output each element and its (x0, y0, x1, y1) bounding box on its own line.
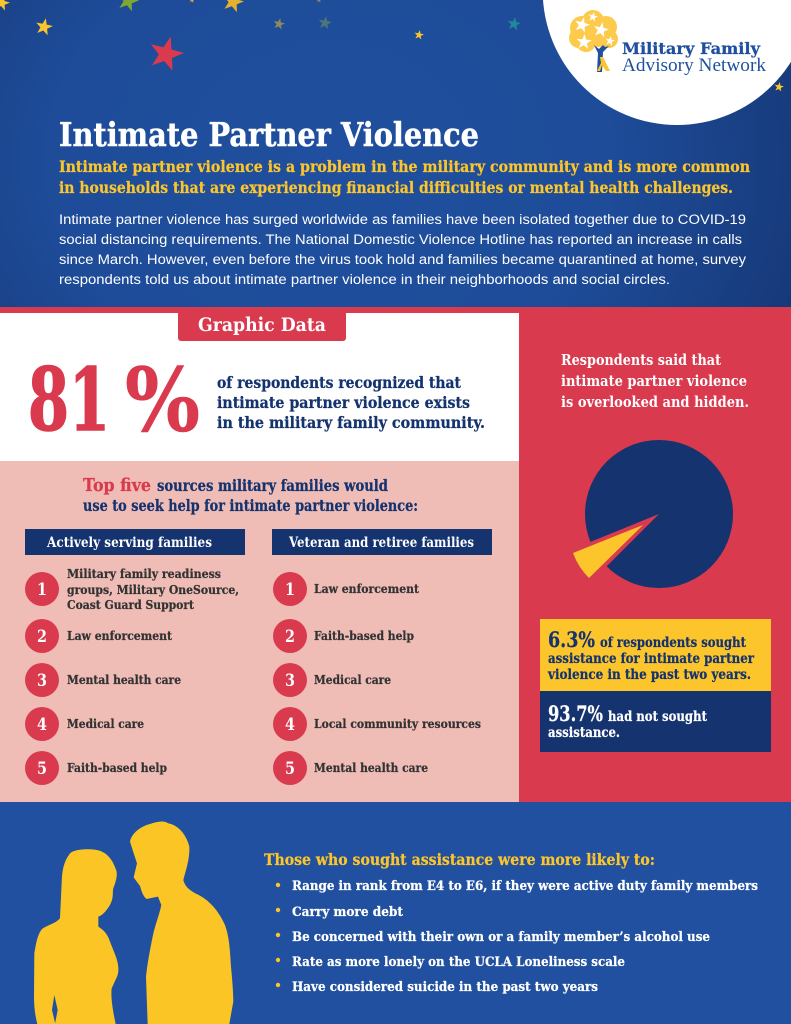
callout: 93.7 percent had not sought assistance: had not sought (608, 709, 707, 725)
stat description (217, 373, 485, 432)
list heading: Those who sought assistance were more likely to: (264, 850, 655, 869)
overlooked and hidden statement: is overlooked and hidden. (561, 394, 749, 411)
logo wordmark (622, 39, 767, 76)
column: actively serving families: 2 (37, 627, 47, 647)
callout: 6.3 percent sought assistance: of respondents sought (600, 635, 746, 651)
subtitle (59, 157, 750, 197)
column: actively serving families: Coast Guard Support (67, 597, 194, 612)
column: actively serving families: Military family readiness (67, 566, 221, 581)
column: veteran and retiree families: Medical care (314, 672, 391, 687)
header background (0, 0, 791, 307)
column: actively serving families: Law enforcement (67, 628, 172, 643)
section heading: Top five (83, 475, 151, 496)
column: veteran and retiree families: 1 (285, 580, 295, 600)
icon: tree logo (569, 10, 618, 72)
callout: 6.3 percent sought assistance: 6.3% (548, 627, 595, 652)
callout: 93.7 percent had not sought assistance (540, 691, 771, 752)
big number (28, 348, 200, 452)
bullet list: Be concerned with their own or a family member’s alcohol use (292, 930, 710, 945)
column: veteran and retiree families: Local community resources (314, 716, 481, 731)
column: actively serving families: Actively serving families (46, 535, 212, 551)
column: actively serving families: 1 (37, 580, 47, 600)
callout: 93.7 percent had not sought assistance: 93.7% (548, 701, 603, 726)
logo wordmark: Advisory Network (622, 56, 767, 76)
decorative stars (0, 0, 785, 92)
logo wordmark: Military Family (622, 39, 761, 58)
bullet list: Have considered suicide in the past two years (292, 980, 598, 995)
column: veteran and retiree families: Law enforcement (314, 581, 419, 596)
overlooked and hidden statement: intimate partner violence (561, 373, 747, 390)
title: Intimate Partner Violence (59, 115, 479, 154)
callout: 6.3 percent sought assistance (540, 619, 771, 691)
intro paragraph: since March. However, even before the virus took hold and families became quarantined at home, survey (59, 252, 746, 267)
section heading (83, 475, 418, 515)
panel: 81 percent stat (0, 313, 519, 461)
logo badge (543, 0, 791, 125)
callout: 93.7 percent had not sought assistance: assistance. (548, 725, 620, 741)
overlooked and hidden statement (561, 352, 749, 411)
intro paragraph: social distancing requirements. The National Domestic Violence Hotline has reported an increase in calls (59, 232, 742, 247)
intro paragraph (59, 212, 746, 287)
big number: 81 (28, 350, 110, 451)
column: actively serving families: 4 (37, 715, 47, 735)
column: veteran and retiree families: Mental health care (314, 760, 428, 775)
column: veteran and retiree families: 5 (285, 759, 295, 779)
bullet list: Carry more debt (292, 905, 403, 920)
bullet list: Rate as more lonely on the UCLA Loneliness scale (292, 955, 625, 970)
column: actively serving families (25, 529, 245, 785)
callout: 6.3 percent sought assistance: violence in the past two years. (547, 667, 751, 683)
column: actively serving families: Faith-based help (67, 760, 167, 775)
column: veteran and retiree families: 3 (285, 671, 295, 691)
callout: 6.3 percent sought assistance: assistance for intimate partner (548, 651, 755, 667)
pie chart (573, 440, 733, 588)
column: actively serving families: groups, Military OneSource, (67, 582, 239, 597)
panel: top five sources (0, 461, 519, 802)
graphic data tab: Graphic Data (198, 314, 326, 336)
bullet list: Range in rank from E4 to E6, if they were active duty family members (292, 879, 758, 894)
section heading: use to seek help for intimate partner violence: (83, 496, 418, 515)
icon: couple silhouette (34, 822, 233, 1024)
overlooked and hidden statement: Respondents said that (561, 352, 721, 369)
bullet list (276, 879, 758, 995)
column: actively serving families: 3 (37, 671, 47, 691)
column: veteran and retiree families: Veteran and retiree families (288, 535, 474, 551)
column: veteran and retiree families: 4 (285, 715, 295, 735)
column: veteran and retiree families (272, 529, 492, 785)
section heading: sources military families would (157, 476, 388, 495)
intro paragraph: Intimate partner violence has surged worldwide as families have been isolated together due to COVID-19 (59, 212, 746, 227)
panel: right red background (0, 307, 791, 802)
intro paragraph: respondents told us about intimate partner violence in their neighborhoods and social circles. (59, 272, 670, 287)
panel: those who sought assistance (0, 802, 791, 1024)
stat description: intimate partner violence exists (217, 393, 470, 412)
stat description: of respondents recognized that (217, 373, 462, 392)
column: actively serving families: 5 (37, 759, 47, 779)
graphic data tab (178, 313, 346, 341)
column: veteran and retiree families: 2 (285, 627, 295, 647)
column: actively serving families: Mental health care (67, 672, 181, 687)
stat description: in the military family community. (217, 413, 485, 432)
column: actively serving families: Medical care (67, 716, 144, 731)
big number: % (125, 348, 200, 452)
column: veteran and retiree families: Faith-based help (314, 628, 414, 643)
